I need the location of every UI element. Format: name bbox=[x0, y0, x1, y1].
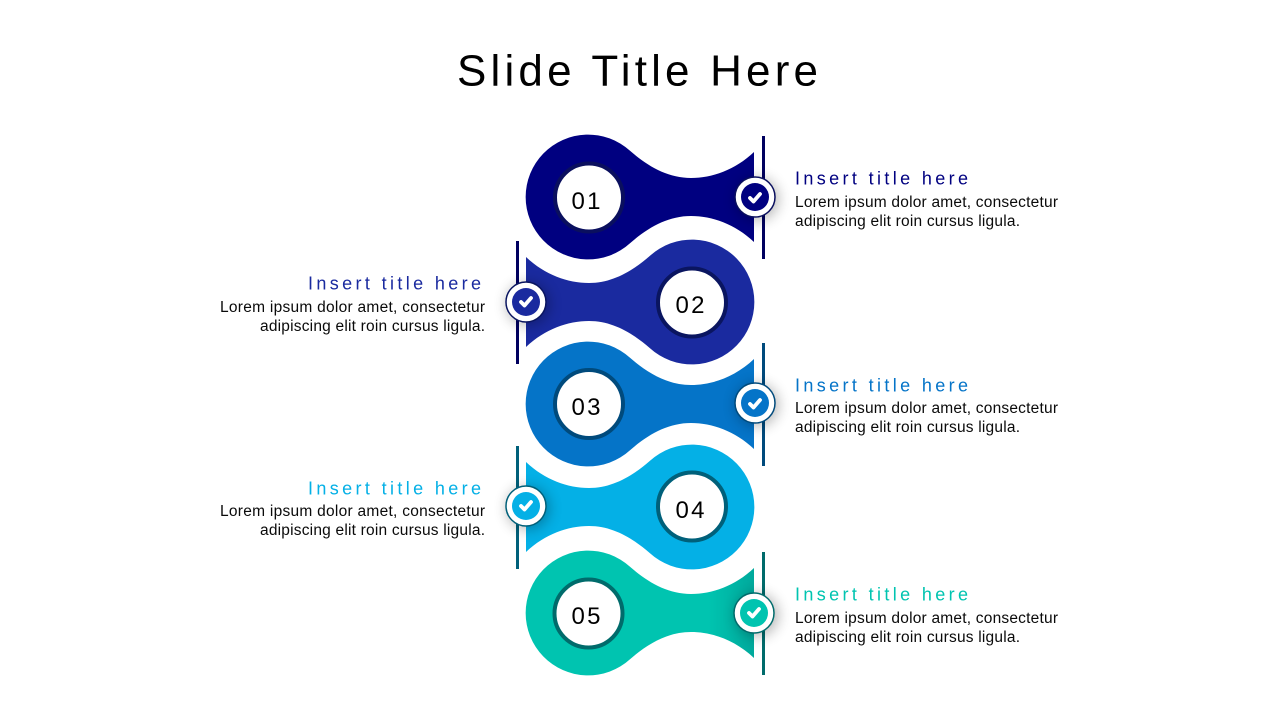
text: step 02: Insert title here bbox=[308, 274, 481, 294]
number circle 05: 05 bbox=[572, 603, 600, 630]
shape: step 05 bbox=[526, 551, 754, 675]
number circle 04 bbox=[658, 472, 726, 540]
text: step 04 bbox=[220, 478, 485, 539]
vertical line 03 bbox=[762, 343, 765, 466]
number circle 04: 04 bbox=[676, 497, 704, 524]
number circle 05 bbox=[554, 580, 622, 648]
number circle 03: 03 bbox=[572, 394, 600, 421]
icon: check badge 03 bbox=[735, 383, 778, 426]
text: step 04: Lorem ipsum dolor amet, consectetur bbox=[220, 503, 485, 520]
text: step 02: Lorem ipsum dolor amet, consectetur bbox=[220, 299, 485, 316]
number circle 01 bbox=[555, 164, 623, 232]
shape: step 03 bbox=[526, 342, 754, 466]
step 01 bbox=[526, 135, 778, 259]
icon: check badge 05 bbox=[734, 593, 778, 636]
text: step 05: Insert title here bbox=[795, 584, 968, 604]
text: step 04: Insert title here bbox=[308, 478, 481, 498]
number circle 02: 02 bbox=[676, 292, 704, 319]
number circle 03 bbox=[555, 370, 623, 438]
step 04 bbox=[506, 445, 754, 569]
vertical line 02 bbox=[516, 241, 519, 364]
text: step 03: Insert title here bbox=[795, 376, 968, 396]
text: step 03: adipiscing elit roin cursus ligula. bbox=[795, 419, 1020, 436]
text: step 03 bbox=[795, 376, 1058, 436]
vertical line 04 bbox=[516, 446, 519, 569]
shape: step 01 bbox=[526, 135, 754, 259]
shape: step 02 bbox=[526, 240, 754, 364]
vertical line 01 bbox=[762, 136, 765, 259]
text: step 01: Insert title here bbox=[795, 168, 968, 188]
step 03 bbox=[526, 342, 778, 466]
number circle 01: 01 bbox=[572, 188, 600, 215]
text: step 01: Lorem ipsum dolor amet, consectetur bbox=[795, 194, 1058, 211]
icon: check badge 04 bbox=[506, 486, 549, 529]
vertical line 05 bbox=[762, 552, 765, 675]
text: step 01 bbox=[795, 168, 1058, 230]
text: step 05 bbox=[795, 584, 1058, 646]
text: step 02 bbox=[220, 274, 485, 335]
icon: check badge 02 bbox=[506, 282, 549, 325]
text: step 05: Lorem ipsum dolor amet, consectetur bbox=[795, 610, 1058, 627]
shape: step 04 bbox=[526, 445, 754, 569]
number circle 02 bbox=[658, 268, 726, 336]
text: step 02: adipiscing elit roin cursus ligula. bbox=[260, 318, 485, 335]
text: step 04: adipiscing elit roin cursus ligula. bbox=[260, 522, 485, 539]
text: step 05: adipiscing elit roin cursus ligula. bbox=[795, 629, 1020, 646]
icon: check badge 01 bbox=[735, 177, 778, 220]
step 02 bbox=[506, 240, 754, 364]
step 05 bbox=[526, 551, 778, 675]
text: step 01: adipiscing elit roin cursus ligula. bbox=[795, 213, 1020, 230]
text: step 03: Lorem ipsum dolor amet, consectetur bbox=[795, 400, 1058, 417]
title: Slide Title Here bbox=[457, 46, 818, 96]
